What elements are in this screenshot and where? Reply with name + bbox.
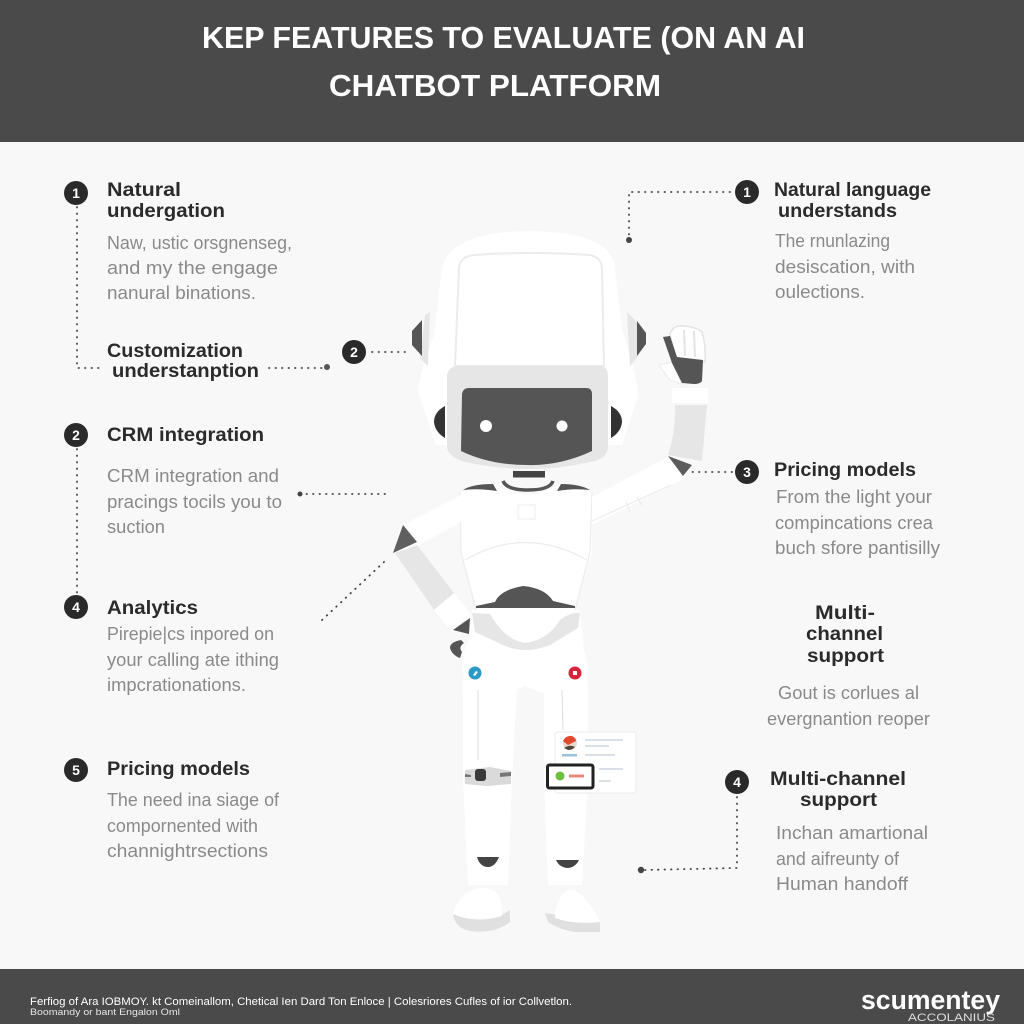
left item 5: pricing models xyxy=(64,758,280,861)
right item 3: pricing models: buch sfore pantisilly xyxy=(775,538,940,558)
right item 1: natural language: Natural language xyxy=(774,180,931,201)
right item 3: pricing models: 3 xyxy=(743,464,751,480)
left item 1: natural understanding: Natural xyxy=(107,180,181,201)
left item 4: analytics: your calling ate ithing xyxy=(107,650,279,670)
right item 4: multi-channel support: Multi-channel xyxy=(770,769,906,790)
right item 1: natural language xyxy=(735,180,931,302)
left item 5: pricing models: 5 xyxy=(72,762,80,778)
right item 1: natural language: The rnunlazing xyxy=(775,231,890,251)
right item 3: pricing models: compincations crea xyxy=(775,513,934,533)
right item 4: multi-channel support: 4 xyxy=(733,774,741,790)
left item 1: natural understanding xyxy=(64,180,292,303)
robot ears xyxy=(412,312,646,438)
left item 5: pricing models: The need ina siage of xyxy=(107,790,280,810)
robot helmet xyxy=(418,231,638,445)
right item 1: natural language: understands xyxy=(778,201,897,222)
left item 4: analytics: impcrationations. xyxy=(107,675,246,695)
title banner: CHATBOT PLATFORM xyxy=(329,68,661,103)
robot torso xyxy=(460,492,592,610)
left item: customization: 2 xyxy=(350,344,358,360)
footer logo: scumentey xyxy=(861,985,1000,1015)
left item 1: natural understanding: undergation xyxy=(107,201,225,222)
left item 2: CRM integration: CRM integration and xyxy=(107,466,279,486)
right item: multi-channel support, centered: support xyxy=(807,646,885,667)
left item: customization: understanption xyxy=(112,361,259,382)
integration card xyxy=(548,732,636,793)
left item 4: analytics xyxy=(64,595,279,695)
left item: customization: Customization xyxy=(107,341,243,362)
robot visor xyxy=(455,253,604,366)
title banner: KEP FEATURES TO EVALUATE (ON AN AI xyxy=(202,20,805,55)
robot eyes xyxy=(480,420,568,432)
right item 1: natural language: desiscation, with xyxy=(775,257,915,277)
left item 2: CRM integration xyxy=(64,423,282,537)
right item 3: pricing models xyxy=(735,460,940,558)
right item 3: pricing models: From the light your xyxy=(776,487,932,507)
left item 5: pricing models: compornented with xyxy=(107,816,258,836)
robot left arm xyxy=(393,495,471,658)
footer bar xyxy=(0,969,1024,1024)
status badges xyxy=(468,666,582,680)
right item: multi-channel support, centered: Multi- xyxy=(815,603,875,624)
dark channel tag xyxy=(548,765,593,788)
right item: multi-channel support, centered xyxy=(767,603,930,729)
robot neck and collar xyxy=(462,471,590,510)
right item: multi-channel support, centered: channel xyxy=(806,624,883,645)
robot left leg xyxy=(462,633,517,885)
left item 2: CRM integration: CRM integration xyxy=(107,425,264,446)
left item 2: CRM integration: suction xyxy=(107,517,165,537)
robot illustration xyxy=(393,231,708,932)
left item 5: pricing models: Pricing models xyxy=(107,759,250,780)
connector lines xyxy=(77,192,737,873)
robot hips xyxy=(462,610,588,694)
right item 3: pricing models: Pricing models xyxy=(774,460,916,481)
left item 1: natural understanding: and my the engage xyxy=(107,258,278,278)
right item 4: multi-channel support: support xyxy=(800,790,878,811)
footer note xyxy=(30,996,572,1017)
right item: multi-channel support, centered: Gout is corlues al xyxy=(778,683,919,703)
left item 5: pricing models: channightrsections xyxy=(107,841,268,861)
card avatar xyxy=(563,736,577,750)
robot right arm xyxy=(592,388,708,525)
footer logo: ACCOLANIUS xyxy=(908,1012,995,1024)
robot right leg xyxy=(544,633,588,885)
robot face screen xyxy=(461,388,592,465)
left item 4: analytics: Pirepie|cs inpored on xyxy=(107,624,274,644)
left item 2: CRM integration: pracings tocils you to xyxy=(107,492,282,512)
left item 1: natural understanding: nanural binations. xyxy=(107,283,256,303)
robot feet xyxy=(453,888,600,932)
right item 4: multi-channel support: Inchan amartional xyxy=(776,823,928,843)
left item: customization xyxy=(107,340,366,382)
left item 1: natural understanding: 1 xyxy=(72,185,80,201)
right item: multi-channel support, centered: evergnantion reoper xyxy=(767,709,930,729)
left item 4: analytics: Analytics xyxy=(107,598,198,619)
left item 4: analytics: 4 xyxy=(72,599,80,615)
footer note: Ferfiog of Ara IOBMOY. kt Comeinallom, Chetical Ien Dard Ton Enloce | Colesriores Cufles of ior Collvetlon. xyxy=(30,996,572,1008)
robot face plate xyxy=(447,366,608,469)
right item 4: multi-channel support: and aifreunty of xyxy=(776,849,900,869)
right item 4: multi-channel support: Human handoff xyxy=(776,874,909,894)
left item 1: natural understanding: Naw, ustic orsgnenseg, xyxy=(107,233,292,253)
left item 2: CRM integration: 2 xyxy=(72,427,80,443)
right item 1: natural language: 1 xyxy=(743,184,751,200)
title banner xyxy=(0,0,1024,142)
robot waving hand xyxy=(659,326,705,384)
right item 4: multi-channel support xyxy=(725,769,928,894)
right item 1: natural language: oulections. xyxy=(775,282,865,302)
footer note: Boomandy or bant Engalon Oml xyxy=(30,1007,180,1017)
